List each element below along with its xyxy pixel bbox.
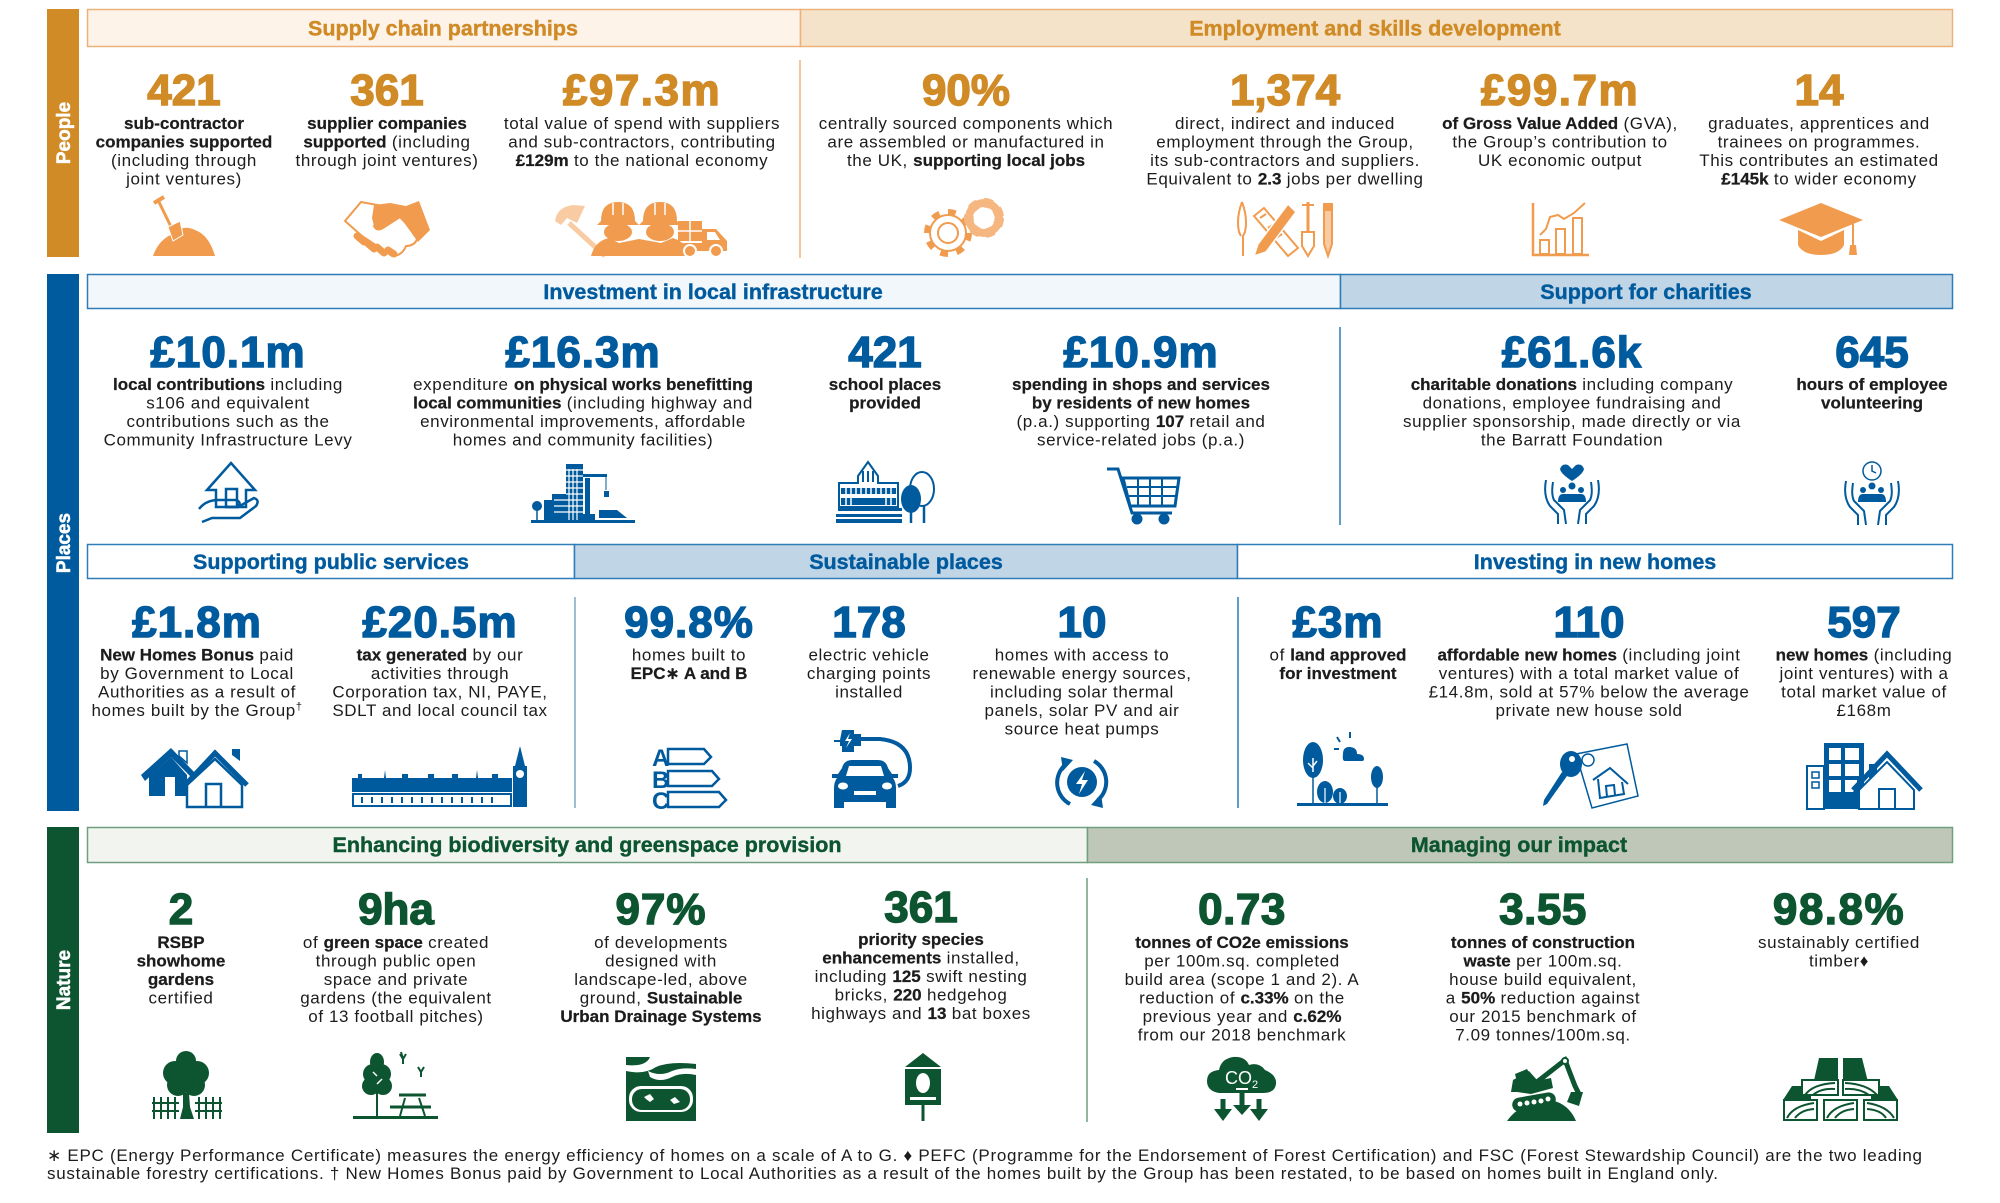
text block: of 13 football pitches): [308, 1007, 484, 1026]
text block: homes built by the Group: [91, 701, 303, 720]
number: 98.8%: [1773, 885, 1905, 934]
text block: expenditure on physical works benefitting: [413, 375, 753, 394]
text block: including 125 swift nesting: [815, 967, 1027, 986]
icon: handshake: [345, 201, 430, 256]
stat: 361 suppliers: [296, 66, 478, 256]
icon: city, crane and train: [531, 464, 635, 523]
icon: CO2 cloud and arrows: [1207, 1057, 1276, 1121]
text block: panels, solar PV and air: [985, 701, 1179, 720]
stat: £10.9m: [1012, 328, 1270, 523]
number: 178: [832, 598, 906, 647]
icon: energy rating arrows: [652, 745, 726, 815]
text block: by Government to Local: [100, 664, 294, 683]
text block: ventures) with a total market value of: [1439, 664, 1739, 683]
stat: £61.6k: [1403, 328, 1741, 524]
number: 645: [1835, 328, 1909, 377]
number: 90%: [922, 66, 1010, 115]
text block: Urban Drainage Systems: [560, 1007, 762, 1026]
number: 97%: [615, 885, 707, 934]
text block: timber♦: [1809, 952, 1869, 970]
text block: sub-contractor: [124, 114, 244, 133]
stat: £20.5m: [332, 598, 548, 807]
text block: are assembled or manufactured in: [827, 132, 1105, 152]
icon: energy rating arrows: C: [652, 788, 669, 815]
number: 14: [1795, 66, 1844, 115]
stat: 97%: [560, 885, 762, 1121]
heading: Investment in local infrastructure: Investment in local infrastructure: [543, 280, 883, 304]
text block: priority species: [858, 930, 984, 949]
text block: contributions such as the: [126, 412, 330, 431]
text block: homes and community facilities): [453, 430, 713, 450]
text block: its sub-contractors and suppliers.: [1150, 151, 1420, 170]
text block: local communities (including highway and: [413, 394, 753, 412]
text block: total value of spend with suppliers: [504, 114, 780, 133]
icon: graduation cap: [1779, 203, 1863, 255]
sidebar: Nature: [47, 827, 79, 1133]
footnote: ∗ EPC (Energy Performance Certificate) measures the energy efficiency of homes on a scale of A to G. ♦ PEFC (Programme for the Endorsement of Forest Certification) and FSC (Forest Stewardship Council) are the two leading: [47, 1146, 1922, 1165]
text block: local contributions including: [113, 375, 343, 394]
heading: Supporting public services: Supporting public services: [193, 550, 469, 574]
text block: charging points: [807, 664, 931, 683]
text block: new homes (including: [1776, 646, 1952, 664]
text block: companies supported: [96, 132, 272, 152]
text block: tonnes of CO2e emissions: [1135, 933, 1349, 952]
icon: tree and fence: [152, 1051, 222, 1119]
text block: electric vehicle: [808, 646, 930, 664]
number: £10.1m: [150, 328, 306, 377]
number: 361: [884, 883, 958, 932]
text block: of Gross Value Added (GVA),: [1442, 114, 1678, 133]
stat: 9ha: [300, 885, 492, 1119]
text block: trainees on programmes.: [1718, 132, 1920, 152]
stat: 645: [1796, 328, 1948, 525]
number: £61.6k: [1502, 328, 1642, 377]
text block: of land approved: [1270, 646, 1406, 664]
icon: tools: [1238, 202, 1332, 256]
text block: Community Infrastructure Levy: [104, 430, 352, 450]
stat: 10: [972, 598, 1192, 808]
heading: Sustainable places: Sustainable places: [809, 550, 1003, 574]
text block: direct, indirect and induced: [1175, 114, 1395, 133]
number: 3.55: [1499, 885, 1587, 934]
text block: highways and 13 bat boxes: [811, 1004, 1031, 1023]
panel: Places: [47, 274, 1952, 815]
stat: £99.7m: [1442, 66, 1678, 255]
icon: clock, people and hands: [1845, 462, 1899, 525]
text block: for investment: [1279, 664, 1397, 683]
heading: Investing in new homes: [1238, 544, 1952, 578]
text block: our 2015 benchmark of: [1449, 1007, 1637, 1026]
stat: 178: [807, 598, 931, 808]
number: 421: [848, 328, 922, 377]
text block: space and private: [324, 970, 468, 989]
text block: †: [296, 701, 303, 713]
text block: provided: [849, 394, 921, 412]
number: 0.73: [1198, 885, 1286, 934]
number: £20.5m: [362, 598, 518, 647]
heading: Managing our impact: Managing our impact: [1411, 833, 1627, 857]
text block: the Barratt Foundation: [1481, 430, 1663, 450]
text block: source heat pumps: [1005, 720, 1159, 738]
text block: tonnes of construction: [1451, 933, 1635, 952]
icon: gears: [929, 203, 999, 252]
stat: 90%: [819, 66, 1113, 252]
text block: £145k to wider economy: [1721, 170, 1917, 188]
text block: renewable energy sources,: [972, 664, 1192, 683]
text block: employment through the Group,: [1156, 132, 1414, 152]
stat: 98.8%: [1758, 885, 1920, 1120]
icon: energy rating arrows: B: [652, 767, 669, 794]
text block: homes with access to: [995, 646, 1169, 664]
icon: workers, hammer and truck: [555, 202, 727, 257]
text block: showhome: [137, 952, 225, 970]
text block: Equivalent to 2.3 jobs per dwelling: [1146, 170, 1424, 188]
text block: of developments: [594, 933, 728, 952]
heading: Enhancing biodiversity and greenspace provision: [88, 828, 1088, 862]
stat: 0.73: [1125, 885, 1359, 1121]
number: £1.8m: [132, 598, 262, 647]
text block: joint ventures) with a: [1778, 664, 1949, 683]
text block: a 50% reduction against: [1446, 988, 1640, 1008]
text block: enhancements installed,: [822, 948, 1020, 968]
text block: graduates, apprentices and: [1708, 114, 1930, 133]
number: 1,374: [1230, 66, 1341, 115]
heading: Supply chain partnerships: Supply chain partnerships: [308, 16, 578, 40]
text block: the UK, supporting local jobs: [847, 151, 1085, 170]
heading: Support for charities: [1340, 274, 1952, 308]
sidebar: Places: Places: [54, 513, 75, 573]
heading: Enhancing biodiversity and greenspace provision: Enhancing biodiversity and greenspace provision: [333, 833, 841, 857]
text block: installed: [835, 682, 903, 702]
icon: school and trees: [836, 462, 934, 523]
text block: supported (including: [303, 132, 471, 152]
text block: through public open: [316, 952, 476, 970]
text block: and sub-contractors, contributing: [508, 132, 776, 152]
text block: RSBP: [157, 933, 205, 952]
text block: waste per 100m.sq.: [1464, 952, 1622, 970]
icon: renewable energy cycle: [1057, 757, 1106, 808]
panel: People: [47, 9, 1952, 258]
text block: homes built to: [632, 646, 746, 664]
number: 10: [1058, 598, 1106, 647]
text block: tax generated by our: [357, 646, 523, 664]
text block: £129m to the national economy: [516, 151, 768, 170]
text block: Corporation tax, NI, PAYE,: [332, 682, 548, 702]
text block: certified: [149, 988, 213, 1008]
number: 99.8%: [624, 598, 754, 647]
icon: CO2 cloud and arrows: CO: [1225, 1068, 1252, 1088]
icon: CO2 cloud and arrows: 2: [1252, 1079, 1258, 1091]
text block: landscape-led, above: [574, 970, 748, 989]
icon: heart, people and hands: [1545, 464, 1599, 524]
text block: per 100m.sq. completed: [1144, 952, 1340, 970]
text block: New Homes Bonus paid: [100, 646, 294, 664]
icon: shovel: [153, 197, 215, 256]
icon: key and house card: [1543, 744, 1638, 808]
text block: s106 and equivalent: [146, 394, 310, 412]
text block: environmental improvements, affordable: [420, 412, 746, 431]
footnote: [47, 1146, 1922, 1183]
text block: affordable new homes (including joint: [1437, 646, 1741, 664]
heading: Supporting public services: [88, 544, 574, 578]
stat: 421 school places: [829, 328, 941, 523]
text block: activities through: [371, 664, 509, 683]
text block: UK economic output: [1478, 151, 1642, 170]
heading: Employment and skills development: Employment and skills development: [1189, 16, 1561, 40]
text block: the Group’s contribution to: [1452, 132, 1668, 152]
text block: (including through: [111, 151, 257, 170]
number: 2: [169, 885, 193, 934]
number: 421: [147, 66, 221, 115]
text block: service-related jobs (p.a.): [1037, 430, 1245, 450]
number: £16.3m: [505, 328, 661, 377]
text block: spending in shops and services: [1012, 375, 1270, 394]
stat: £97.3m: [504, 66, 780, 257]
text block: Authorities as a result of: [98, 682, 296, 702]
icon: house in hand: [199, 463, 258, 522]
text block: bricks, 220 hedgehog: [835, 986, 1007, 1004]
heading: Managing our impact: [1088, 828, 1952, 862]
text block: joint ventures): [125, 170, 242, 188]
text block: 7.09 tonnes/100m.sq.: [1455, 1026, 1631, 1044]
icon: land with trees and sun: [1297, 732, 1388, 806]
stat: £1.8m: [91, 598, 303, 807]
number: 361: [350, 66, 424, 115]
text block: build area (scope 1 and 2). A: [1125, 970, 1359, 989]
text block: sustainably certified: [1758, 933, 1920, 952]
heading: Investing in new homes: Investing in new homes: [1474, 550, 1716, 574]
heading: Investment in local infrastructure: [88, 274, 1340, 308]
text block: by residents of new homes: [1032, 394, 1250, 412]
text block: gardens (the equivalent: [300, 988, 492, 1008]
heading: Employment and skills development: [800, 10, 1952, 46]
icon: Houses of Parliament: [352, 746, 527, 807]
icon: tree, birds and picnic table: [353, 1052, 438, 1119]
number: £97.3m: [563, 66, 721, 115]
stat: 99.8%: [624, 598, 754, 815]
text block: charitable donations including company: [1411, 375, 1733, 394]
text block: (p.a.) supporting 107 retail and: [1017, 412, 1265, 431]
text block: hours of employee: [1796, 375, 1948, 394]
stat: 1,374: [1146, 66, 1424, 256]
text block: donations, employee fundraising and: [1423, 394, 1721, 412]
number: £3m: [1292, 598, 1384, 647]
text block: This contributes an estimated: [1699, 151, 1939, 170]
icon: rising bar chart: [1533, 203, 1589, 255]
icon: stacked timber: [1783, 1058, 1898, 1120]
text block: SDLT and local council tax: [332, 701, 548, 720]
number: 597: [1827, 598, 1901, 647]
sidebar: People: People: [54, 102, 75, 164]
stat: £3m: [1270, 598, 1406, 806]
number: £99.7m: [1481, 66, 1639, 115]
text block: centrally sourced components which: [819, 114, 1113, 133]
stat: 421 sub-contractors: [96, 66, 272, 256]
icon: energy rating arrows: A: [652, 745, 669, 772]
text block: designed with: [605, 952, 717, 970]
text block: including solar thermal: [990, 682, 1174, 702]
footnote: sustainable forestry certifications. † New Homes Bonus paid by Government to Local Authorities as a result of the homes built by the Group has been restated, to be based on homes built in England only.: [47, 1164, 1718, 1183]
stat: 14: [1699, 66, 1939, 255]
number: 110: [1554, 598, 1624, 647]
icon: electric car and plug: [832, 730, 910, 808]
number: £10.9m: [1063, 328, 1219, 377]
stat: 110: [1429, 598, 1749, 808]
sidebar: Nature: Nature: [54, 950, 75, 1010]
icon: shopping cart: [1107, 469, 1179, 523]
text block: private new house sold: [1495, 701, 1683, 720]
text block: volunteering: [1821, 394, 1923, 412]
heading: Supply chain partnerships: [88, 10, 800, 46]
icon: sustainable drainage landscape: [626, 1057, 696, 1121]
panel: Nature: [47, 827, 1952, 1133]
stat: £16.3m: [413, 328, 753, 523]
icon: excavator: [1507, 1058, 1583, 1121]
sidebar: Places: [47, 274, 79, 811]
text block: £14.8m, sold at 57% below the average: [1429, 682, 1749, 702]
text block: school places: [829, 375, 941, 394]
text block: gardens: [148, 970, 214, 989]
text block: through joint ventures): [296, 151, 478, 170]
text block: ground, Sustainable: [580, 988, 742, 1008]
stat: £10.1m: [104, 328, 352, 522]
text block: total market value of: [1781, 682, 1947, 702]
text block: house build equivalent,: [1449, 970, 1637, 989]
sidebar: People: [47, 9, 79, 257]
heading: Sustainable places: [574, 544, 1238, 578]
number: 9ha: [358, 885, 434, 934]
text block: from our 2018 benchmark: [1138, 1026, 1346, 1044]
text block: £168m: [1837, 701, 1891, 720]
text block: reduction of c.33% on the: [1139, 988, 1345, 1008]
icon: apartment block and house: [1807, 743, 1921, 809]
text block: supplier sponsorship, made directly or via: [1403, 412, 1741, 431]
stat: 3.55: [1446, 885, 1640, 1121]
text block: previous year and c.62%: [1143, 1007, 1341, 1026]
stat: 361 species: [811, 883, 1031, 1121]
icon: two houses: [141, 748, 247, 807]
heading: Support for charities: Support for charities: [1540, 280, 1752, 304]
text block: of green space created: [303, 933, 489, 952]
icon: bird box: [905, 1053, 941, 1121]
stat: 597: [1776, 598, 1952, 809]
stat: 2: [137, 885, 225, 1119]
text block: EPC∗ A and B: [631, 664, 747, 683]
text block: supplier companies: [307, 114, 467, 133]
